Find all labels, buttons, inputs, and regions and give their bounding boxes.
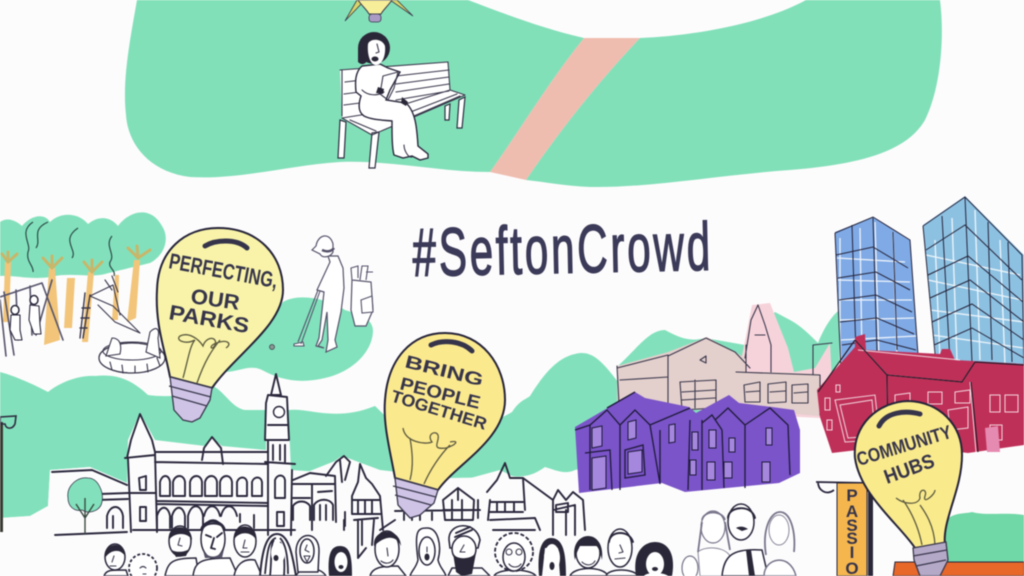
mock tudor buildings bbox=[345, 463, 585, 558]
pink footpath bbox=[490, 38, 640, 180]
bulb text: PARKS bbox=[167, 301, 251, 338]
bulb text bbox=[854, 422, 954, 489]
passion sign: PASSIO bbox=[845, 486, 859, 576]
woman with dark hair bbox=[538, 538, 566, 576]
tree branches and leaves bbox=[2, 246, 150, 272]
main hall bbox=[107, 414, 295, 532]
tree foliage bbox=[0, 212, 166, 278]
person in hood bbox=[296, 536, 326, 576]
green lawn left bbox=[125, 0, 584, 177]
panel: top park scene bbox=[125, 0, 942, 187]
woman with curly hair bbox=[635, 542, 673, 576]
passion sign bbox=[816, 482, 873, 576]
panel: red community building bbox=[817, 334, 1024, 453]
roundabout with children bbox=[99, 329, 165, 373]
man bbox=[234, 525, 262, 576]
boundary wall and ground bbox=[52, 470, 128, 535]
bulb text: PERFECTING, bbox=[167, 248, 280, 293]
light bulb: perfecting our parks bbox=[157, 228, 283, 422]
park bench bbox=[338, 62, 465, 168]
tree trunks bbox=[3, 260, 140, 345]
bulb text: TOGETHER bbox=[389, 387, 489, 434]
slide with ladder bbox=[80, 276, 140, 338]
crowd of people bbox=[104, 504, 796, 576]
street lamp left bbox=[0, 416, 16, 532]
woman reading on bench bbox=[356, 32, 428, 160]
man bbox=[370, 531, 406, 576]
panel: town hall bbox=[0, 372, 600, 576]
woman with long hair bbox=[764, 512, 796, 576]
icon: light bulb at top bbox=[345, 0, 413, 22]
panel: green hills band bbox=[0, 310, 840, 518]
panel: playground with trees bbox=[0, 212, 166, 373]
golf bag bbox=[351, 266, 373, 326]
woman with dark hair bbox=[329, 546, 352, 576]
panel: golf green bbox=[225, 297, 373, 381]
bulb text: BRING bbox=[403, 351, 485, 390]
title: #SeftonCrowd bbox=[412, 208, 711, 290]
small tree bbox=[68, 478, 102, 534]
woman with fringe bbox=[570, 536, 608, 576]
man bbox=[606, 529, 638, 576]
bearded man with stubble bbox=[193, 520, 238, 576]
man with turban bbox=[448, 526, 490, 576]
man with moustache and tie bbox=[722, 504, 768, 576]
white backing of buildings bbox=[0, 372, 600, 576]
light bulb: community hubs bbox=[854, 401, 962, 576]
bulb text: COMMUNITY bbox=[854, 422, 954, 471]
person with curly hair bbox=[129, 554, 157, 576]
bulb text bbox=[167, 248, 280, 338]
panel: purple houses bbox=[575, 392, 800, 493]
golf ball bbox=[270, 344, 274, 350]
bulb text: PEOPLE bbox=[398, 373, 482, 413]
person in hood bbox=[410, 528, 446, 576]
panel: blue tower right bbox=[923, 196, 1024, 368]
swing set bbox=[0, 280, 63, 356]
side buildings bbox=[293, 456, 350, 530]
golfer with club bbox=[294, 236, 344, 352]
right green hill bbox=[945, 512, 1024, 565]
bearded man bbox=[165, 526, 199, 576]
person bbox=[104, 544, 128, 576]
bulb text bbox=[389, 351, 489, 434]
clock tower bbox=[265, 374, 295, 535]
panel: blue tower left bbox=[835, 217, 918, 370]
woman with long hair bbox=[260, 534, 296, 576]
bulb text: HUBS bbox=[881, 450, 938, 489]
child bbox=[682, 556, 698, 576]
bulb text: OUR bbox=[189, 285, 241, 315]
green lawn right bbox=[526, 0, 942, 187]
light bulb: bring people together bbox=[385, 333, 505, 518]
person with curly hair bbox=[494, 533, 536, 576]
arched windows bbox=[160, 476, 262, 496]
orange roof bbox=[893, 562, 1024, 576]
girl with plaits bbox=[698, 511, 732, 576]
panel: beige building and church bbox=[617, 303, 833, 418]
